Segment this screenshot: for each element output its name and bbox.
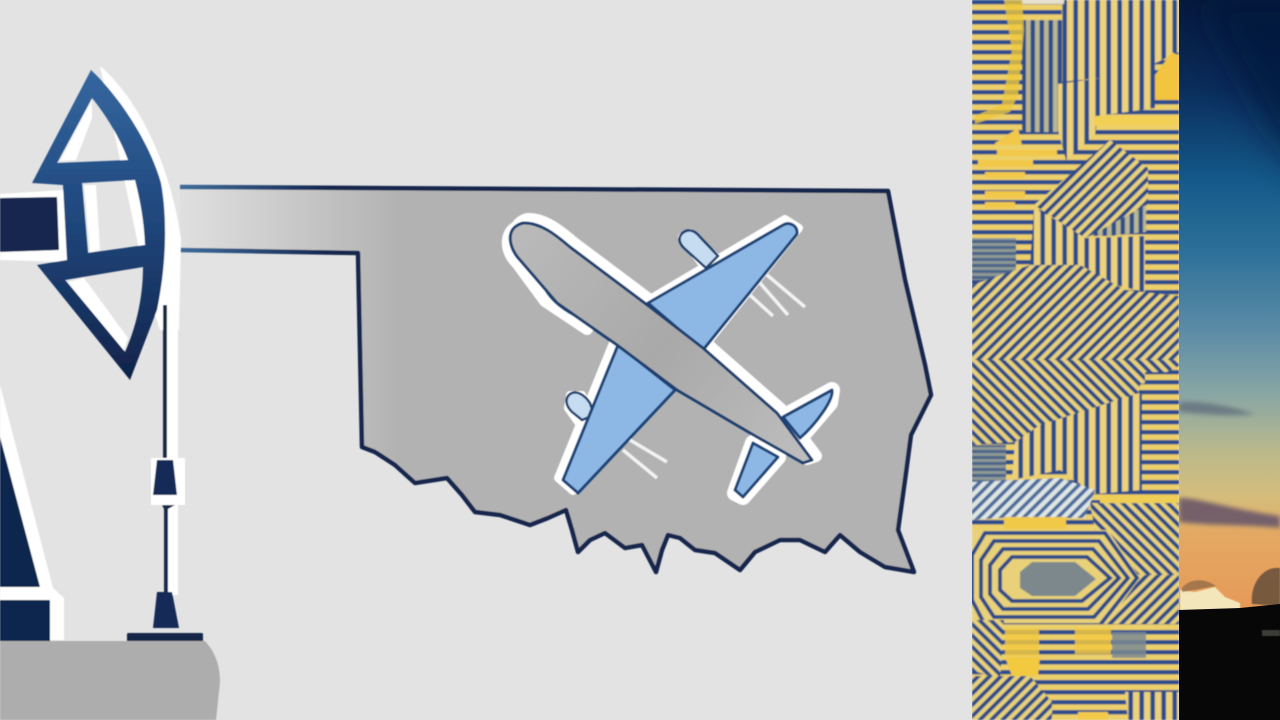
top cream bar [1022, 0, 1064, 4]
walking beam [0, 197, 59, 252]
base plate [127, 633, 203, 642]
horizon trees [1182, 580, 1216, 592]
A-frame leg [0, 437, 40, 587]
airplane icon [508, 219, 832, 497]
right horizontal traces [1144, 371, 1167, 384]
bottom left diagonal traces [972, 676, 1052, 720]
grey pad [1112, 632, 1146, 658]
distant lights [1262, 630, 1280, 636]
lower tailplane [735, 443, 778, 497]
white rod strip upper [165, 320, 178, 460]
white halo behind leg [0, 385, 64, 640]
under-fuselage engine [543, 285, 590, 322]
upper wing [648, 224, 797, 350]
white rod strip lower [165, 503, 178, 595]
gold pads [1005, 628, 1111, 676]
stuffing box lower [153, 592, 179, 628]
chevron traces [1090, 503, 1179, 575]
thin grey cloud [1179, 402, 1255, 415]
grey nested block [972, 238, 1016, 280]
grey bullseye [1020, 562, 1096, 596]
tree silhouette [1252, 568, 1280, 606]
lower engine [566, 392, 594, 420]
yellow bar [1094, 116, 1179, 126]
white collar box [151, 458, 185, 505]
oil pump jack [0, 66, 220, 720]
diagonal traces [1034, 140, 1148, 238]
bottom right traces [1125, 692, 1179, 720]
central vertical traces [1030, 208, 1145, 292]
grey concrete pad [0, 641, 220, 720]
white halo behind horsehead [100, 66, 181, 330]
upper engine [680, 230, 718, 268]
polished rod upper [163, 305, 167, 460]
base block [0, 600, 50, 641]
nested grey vertical traces [1022, 20, 1062, 132]
exhaust streaks [623, 275, 805, 478]
left edge traces [972, 620, 1004, 680]
bottom bus traces [1002, 623, 1179, 632]
white halo [508, 219, 832, 497]
distant pale buildings [1180, 587, 1240, 612]
concentric octagon traces [972, 530, 1140, 628]
polished rod lower [162, 505, 175, 592]
purple sunset cloud [1179, 498, 1280, 528]
vertical traces below [1012, 392, 1142, 494]
sunset sky photo panel [1179, 0, 1280, 720]
pale shining traces [972, 478, 1095, 520]
stuffing box upper [153, 460, 177, 495]
diagonal backward traces [972, 360, 1179, 445]
grey transition [1090, 205, 1146, 236]
circuit pattern panel [972, 0, 1179, 720]
horsehead [32, 70, 165, 380]
fuselage [510, 223, 812, 463]
left yellow pads [978, 128, 1057, 208]
Oklahoma state silhouette [180, 187, 931, 572]
bottom yellow pad [1078, 712, 1108, 720]
yellow bars [1100, 495, 1179, 503]
base horizontal traces [972, 0, 1179, 576]
lower diagonal traces [972, 265, 1179, 360]
grey nested block [972, 445, 1006, 483]
lower wing [563, 345, 675, 493]
dark ground [1179, 604, 1280, 720]
middle vertical traces [1058, 60, 1155, 160]
white halo behind beam [0, 190, 70, 262]
upper tailplane [783, 390, 832, 438]
white inner highlights [60, 100, 128, 350]
solid gold corner [1155, 52, 1179, 100]
vertical yellow trace [975, 0, 1024, 124]
top vertical traces [1060, 0, 1179, 82]
